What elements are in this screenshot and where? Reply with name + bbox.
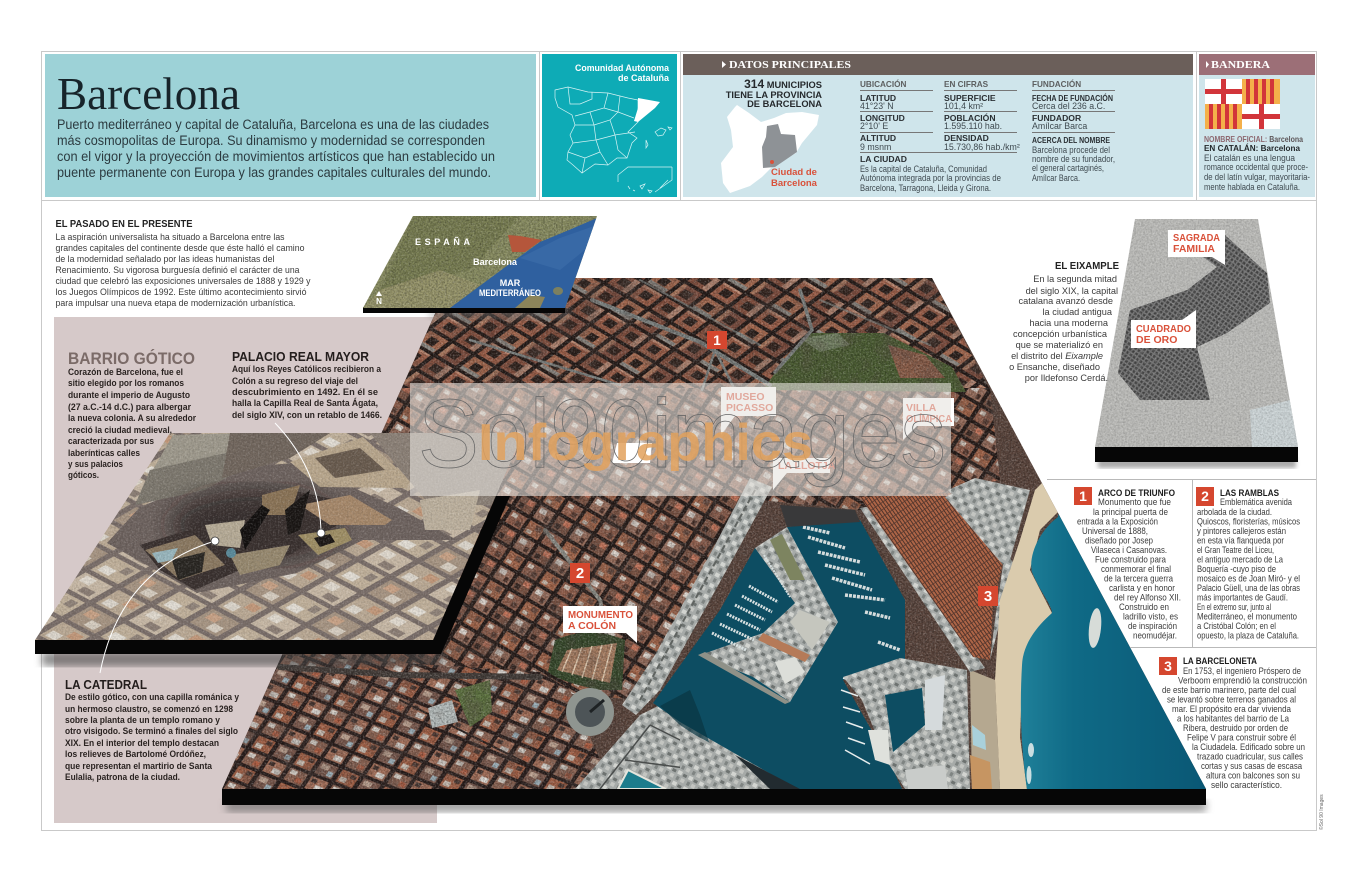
column: ubicación [860, 78, 933, 152]
note 3: La Barceloneta: Felipe V para construir sobre él [1187, 732, 1296, 742]
label: Museo Picasso [721, 387, 776, 435]
text block: La Catedral: De estilo gótico, con una capilla románica y [65, 692, 240, 702]
flag text [1204, 135, 1310, 192]
column: ubicación: UBICACIÓN [860, 78, 906, 89]
label: La Llotja [773, 458, 836, 490]
note 2: Las Ramblas: Quioscos, floristerías, músicos [1197, 516, 1300, 526]
label: Monumento a Colón: A COLÓN [568, 619, 616, 632]
text block: Barrio Gótico: sitio elegido por los romanos [68, 378, 184, 388]
port water [653, 520, 905, 789]
note 1: Arco de Triunfo [1074, 487, 1181, 640]
column: ubicación: 9 msnm [860, 142, 891, 152]
column: ubicación: LATITUD [860, 93, 896, 103]
text block: Palacio Real Mayor: Colón a su regreso del viaje del [232, 376, 358, 386]
marker 2 [570, 563, 590, 583]
locator heading: Comunidad Autónoma [575, 63, 670, 73]
text block: El Eixample: EL EIXAMPLE [1055, 260, 1119, 272]
note 2: Las Ramblas: a Cristóbal Colón; en el [1197, 621, 1276, 631]
label: La Llotja: LA LLOTJA [778, 460, 836, 472]
text block: El Eixample: concepción urbanística [1013, 329, 1108, 339]
label: Villa Olímpica: VILLA [906, 402, 937, 414]
note 2: Las Ramblas: 2 [1201, 488, 1209, 504]
city label: Barcelona [771, 178, 818, 189]
text block: Barrio Gótico: Corazón de Barcelona, fue el [68, 367, 183, 377]
note 1: Arco de Triunfo: 1 [1079, 488, 1087, 504]
lower left shadow and quay [680, 734, 740, 771]
label: Cuadrado de Oro: DE ORO [1136, 334, 1177, 346]
note 1: Arco de Triunfo: de la tercera guerra [1104, 574, 1174, 584]
text block: el pasado en el presente: EL PASADO EN EL PRESENTE [56, 218, 192, 230]
pier finger lines [841, 678, 870, 764]
column: fundación: nombre de su fundador, [1032, 154, 1115, 164]
text block: La Catedral: LA CATEDRAL [65, 678, 147, 692]
mottling [36, 433, 495, 640]
location satellite map: MEDITERRÁNEO [479, 288, 541, 298]
leader: Palacio Real Mayor [275, 423, 325, 537]
flag text: romance occidental que proce- [1204, 162, 1308, 172]
wharf wedge [755, 527, 838, 632]
watermark orange text: Infographics [478, 414, 813, 472]
la ciudad text: Barcelona, Tarragona, Lleida y Girona. [860, 183, 991, 193]
mottling over built land [236, 278, 1130, 789]
text block: El Eixample: que se materializó en [1016, 340, 1103, 350]
bandera header [1199, 54, 1315, 75]
intro text: puente permanente con Europa y las grandes capitales culturales del mundo. [57, 165, 491, 180]
column: ubicación: LONGITUD [860, 113, 905, 123]
note 2: Las Ramblas: el antiguo mercado de La [1197, 554, 1284, 564]
intro text [57, 117, 495, 180]
text block: El Eixample: la ciudad antigua [1043, 307, 1113, 317]
note 2: Las Ramblas: y pintores callejeros están [1197, 526, 1286, 536]
text block: Barrio Gótico: laberínticas calles [68, 448, 140, 458]
text block: Palacio Real Mayor: descubrimiento en 1492. En él se [232, 387, 378, 397]
flag text: mente hablada en Cataluña. [1204, 182, 1300, 192]
note 1: Arco de Triunfo: la principal puerta de [1093, 507, 1168, 517]
panel: pink background for Barrio Gótico [54, 317, 437, 823]
text block: Palacio Real Mayor: Aquí los Reyes Católicos recibieron a [232, 364, 382, 374]
column: fundación: FECHA DE FUNDACIÓN [1032, 92, 1113, 103]
note 3: La Barceloneta: Verboom emprendió la construcción [1178, 676, 1307, 686]
title: Barcelona [57, 69, 240, 119]
note 2: Las Ramblas: mosaico es de Joan Miró- y el [1197, 574, 1300, 584]
open sea [1021, 505, 1210, 790]
text block: Barrio Gótico: creció la ciudad medieval, [68, 425, 172, 435]
note 1: Arco de Triunfo: Vilaseca i Casanovas. [1091, 545, 1167, 555]
map of Spain [555, 87, 672, 193]
marker 1 [707, 331, 727, 349]
note 2: Las Ramblas: arbolada de la ciudad. [1197, 507, 1272, 517]
label: Villa Olímpica [903, 398, 954, 440]
text block: La Catedral: un hermoso claustro, se comenzó en 1298 [65, 704, 233, 714]
text block: La Catedral: otro visigodo. Se terminó a finales del siglo [65, 726, 238, 736]
location satellite map: N [376, 297, 382, 306]
credit: ©Sol 90 Images [1318, 794, 1325, 830]
note 1: Arco de Triunfo: entrada a la Exposición [1077, 516, 1158, 526]
text block: La Catedral: los relieves de Bartolomé Ordóñez, [65, 749, 206, 759]
note 1: Arco de Triunfo: del rey Alfonso XII. [1114, 592, 1181, 602]
label: Sagrada Familia [1168, 230, 1225, 265]
text block: Palacio Real Mayor: PALACIO REAL MAYOR [232, 349, 370, 364]
column: fundación: Cerca del 236 a.C. [1032, 101, 1105, 111]
text block: el pasado en el presente: grandes capitales del continente desde que éste halló el camino [56, 243, 304, 253]
location satellite map: MAR [500, 278, 521, 288]
column: fundación: ACERCA DEL NOMBRE [1032, 135, 1110, 145]
location satellite map [360, 214, 600, 313]
label: Museo Picasso: PICASSO [726, 402, 773, 414]
location satellite map: Barcelona [473, 257, 518, 267]
la ciudad text: LA CIUDAD [860, 154, 907, 164]
note 1: Arco de Triunfo: ladrillo visto, es [1123, 612, 1178, 622]
east pier [843, 658, 970, 789]
column: fundación: el general cartaginés, [1032, 163, 1104, 173]
note 2: Las Ramblas: el Gran Teatre del Liceu, [1197, 545, 1274, 555]
breakwater [1088, 608, 1102, 648]
Eixample shadow [1098, 458, 1296, 468]
locator heading: de Cataluña [618, 73, 670, 83]
note 2: Las Ramblas: Palacio Güell, una de las obras [1197, 583, 1300, 593]
text block: El Eixample: por Ildefonso Cerdá. [1025, 373, 1108, 383]
note 1: Arco de Triunfo: diseñado por Josep [1085, 536, 1153, 546]
note 1: Arco de Triunfo: carlista y en honor [1109, 583, 1175, 593]
note 1: Arco de Triunfo: Universal de 1888, [1082, 526, 1148, 536]
note 2: Las Ramblas: En el extremo sur, junto al [1197, 602, 1271, 612]
column: en cifras: SUPERFICIE [944, 93, 996, 103]
la ciudad text [860, 154, 1001, 193]
municipios callout: 314 MUNICIPIOS [744, 77, 822, 91]
label: Cuadrado de Oro: CUADRADO [1136, 323, 1191, 335]
harbour boats [803, 527, 900, 650]
column: en cifras: 101,4 km² [944, 101, 983, 111]
note 1: Arco de Triunfo: ARCO DE TRIUNFO [1098, 488, 1175, 499]
note 3: La Barceloneta: mar. El propósito era dar vivienda [1172, 704, 1292, 714]
Maremagnum pier [700, 603, 838, 702]
note 1: Arco de Triunfo: de inspiración [1128, 621, 1177, 631]
column: fundación: Barcelona procede del [1032, 145, 1110, 155]
mini map shadow [430, 305, 570, 319]
watermark band [410, 379, 951, 496]
old town mid [300, 388, 1000, 700]
header bar [683, 54, 1193, 75]
text block: La Catedral: XIX. En el interior del templo destacan [65, 738, 219, 748]
note 3: La Barceloneta [1159, 656, 1307, 790]
text block: El Eixample: o Ensanche, diseñado [1009, 362, 1100, 372]
text block: Barrio Gótico: la nueva colonia. A su alrededor [68, 413, 196, 423]
note 3: La Barceloneta: a los habitantes del barrio de La [1177, 714, 1290, 724]
text block: el pasado en el presente [56, 218, 311, 308]
leader: La Catedral [100, 537, 219, 673]
note 2: Las Ramblas: opuesto, la plaza de Cataluña. [1197, 630, 1299, 640]
Eixample map [1090, 216, 1300, 462]
municipios callout [726, 77, 822, 109]
text block: El Eixample: catalana avanzó desde [1018, 296, 1113, 306]
column: fundación: Amílcar Barca [1032, 121, 1087, 131]
road to Barceloneta [860, 506, 985, 672]
note 2: Las Ramblas: Mediterráneo, el monumento [1197, 612, 1297, 622]
marina basin boats [712, 555, 790, 650]
panel: datos principales [683, 54, 1193, 197]
Barrio Gótico aerial inset [30, 430, 530, 654]
note 2: Las Ramblas [1196, 487, 1300, 640]
port promenade [622, 478, 772, 715]
beach [995, 480, 1060, 789]
header bar: DATOS PRINCIPALES [729, 59, 851, 71]
column: fundación: Amílcar Barca. [1032, 173, 1080, 183]
note 3: La Barceloneta: En 1753, el ingeniero Próspero de [1183, 666, 1301, 676]
column: fundación [1032, 78, 1115, 183]
text block: El Eixample: del siglo XIX, la capital [1026, 286, 1118, 296]
intro text: con el vigor y la proyección de movimientos artísticos que han establecido un [57, 149, 495, 164]
text block: El Eixample: el distrito del Eixample [1011, 351, 1103, 361]
note 1: Arco de Triunfo: conmemorar el final [1101, 564, 1171, 574]
note 2: Las Ramblas: en esta vía flanqueda por [1197, 536, 1284, 546]
la ciudad text: Es la capital de Cataluña, Comunidad [860, 164, 987, 174]
note 3: La Barceloneta: la Ciudadela. Edificado sobre un [1192, 742, 1305, 752]
note 2: Las Ramblas: LAS RAMBLAS [1220, 488, 1279, 499]
panel: Comunidad Autónoma de Cataluña locator map [542, 54, 677, 197]
municipios callout: DE BARCELONA [747, 99, 822, 109]
text block: Palacio Real Mayor: del siglo XIV, con un retablo de 1466. [232, 410, 382, 420]
label: Sagrada Familia: FAMILIA [1173, 243, 1215, 255]
text block: el pasado en el presente: de la modernidad señalado por las ideas humanistas del [56, 254, 274, 264]
text block: El Eixample: hacia una moderna [1029, 318, 1109, 328]
label: Monumento a Colón [563, 606, 637, 643]
flag text: EN CATALÁN: Barcelona [1204, 143, 1300, 153]
marker 3 [978, 586, 998, 606]
text block: Palacio Real Mayor: halla la Capilla Real de Santa Ágata, [232, 398, 378, 408]
text block: El Eixample [1009, 260, 1119, 383]
marker 3: 3 [984, 588, 992, 605]
shadow under main map [226, 800, 1206, 812]
inset slab [35, 496, 510, 654]
Drassanes roof [548, 632, 625, 690]
note 1: Arco de Triunfo: neomudéjar. [1133, 630, 1177, 640]
label: Museo Picasso: MUSEO [726, 391, 765, 403]
note 1: Arco de Triunfo: Monumento que fue [1098, 497, 1171, 507]
text block: Barrio Gótico: (27 a.C.-14 d.C.) para albergar [68, 402, 191, 412]
column: en cifras: 1.595.110 hab. [944, 121, 1002, 131]
column: ubicación: ALTITUD [860, 133, 896, 143]
locator heading [575, 63, 670, 83]
note 3: La Barceloneta: trazado cuadricular, sus calles [1197, 752, 1303, 762]
text block: El Eixample: En la segunda mitad [1033, 274, 1117, 284]
intro text: más cosmopolitas de Europa. Su dinamismo y modernidad se corresponden [57, 133, 485, 148]
Barceloneta [860, 493, 1003, 660]
marker 2: 2 [576, 565, 584, 582]
lower grey quays [575, 706, 769, 789]
text block: Barrio Gótico: y sus palacios [68, 459, 123, 469]
cloister [172, 552, 205, 580]
text block: La Catedral [65, 678, 240, 782]
green square [455, 680, 492, 727]
Colón roundabout [566, 688, 614, 736]
column: ubicación: 2°10' E [860, 121, 888, 131]
upper blocks [153, 434, 230, 470]
text block: el pasado en el presente: los Juegos Olímpicos de 1992. Este último acontecimiento sirvió [56, 287, 306, 297]
text block: Barrio Gótico: caracterizada por sus [68, 436, 154, 446]
text block: Palacio Real Mayor [232, 349, 382, 420]
text block: el pasado en el presente: Renacimiento. Su vigorosa burguesía definió el carácter de una [56, 265, 300, 275]
note 3: La Barceloneta: Ribera, destruido por orden de [1183, 723, 1288, 733]
flag text: NOMBRE OFICIAL: Barcelona [1204, 135, 1303, 144]
location satellite map: ESPAÑA [415, 237, 470, 247]
cathedral complex [140, 492, 337, 590]
watermark outline text: Sol90images [418, 379, 946, 488]
main map base [222, 789, 1206, 805]
text block: Barrio Gótico: durante el imperio de Augusto [68, 390, 190, 400]
column: en cifras [944, 80, 1020, 152]
map of Catalonia [721, 105, 819, 193]
text block: La Catedral: que representan el martirio de Santa [65, 761, 213, 771]
text block: Barrio Gótico: BARRIO GÓTICO [68, 349, 195, 368]
column: ubicación: 41°23' N [860, 101, 894, 111]
column: fundación: FUNDACIÓN [1032, 78, 1081, 89]
panel: bandera [1199, 54, 1315, 197]
cathedral shadow [170, 489, 340, 561]
note 1: Arco de Triunfo: Fue construido para [1095, 554, 1167, 564]
note 3: La Barceloneta: de este barrio marinero, parte del cual [1162, 685, 1296, 695]
note 3: La Barceloneta: se levantó sobre terrenos ganados al [1167, 694, 1296, 704]
note 3: La Barceloneta: cortas y sus casas de escasa [1201, 761, 1303, 771]
note 2: Las Ramblas: Boquería -cuyo piso de [1197, 564, 1276, 574]
avenues [280, 280, 930, 780]
text block: Barrio Gótico: góticos. [68, 470, 99, 480]
eixample district [400, 278, 990, 392]
text block: el pasado en el presente: La aspiración universalista ha situado a Barcelona entre las [56, 232, 285, 242]
main aerial map of Barcelona [220, 278, 1220, 805]
note 2: Las Ramblas: Emblemática avenida [1220, 497, 1293, 507]
city label: Ciudad de [771, 167, 817, 178]
note 3: La Barceloneta: 3 [1164, 658, 1172, 674]
column: en cifras: POBLACIÓN [944, 112, 996, 123]
column: en cifras: 15.730,86 hab./km² [944, 142, 1020, 152]
plaza field around cathedral [107, 463, 457, 593]
text block: el pasado en el presente: ciudad que celebró las exposiciones universales de 1888 y 1929 y [56, 276, 311, 286]
label: Cuadrado de Oro [1131, 310, 1196, 348]
label: Monumento a Colón: MONUMENTO [568, 609, 633, 621]
column: fundación: FUNDADOR [1032, 113, 1082, 123]
text block: La Catedral: sobre la planta de un templo romano y [65, 715, 221, 725]
column: en cifras: DENSIDAD [944, 133, 989, 143]
park [763, 333, 966, 392]
flag text: de del latín vulgar, mayoritaria- [1204, 172, 1310, 182]
marker 1: 1 [713, 332, 721, 348]
lower left neighbourhood [222, 655, 600, 789]
text block: La Catedral: Eulalia, patrona de la ciudad. [65, 772, 180, 782]
panel: title and introduction [45, 54, 536, 197]
municipios callout: TIENE LA PROVINCIA [726, 90, 822, 100]
flag of Barcelona [1205, 79, 1280, 129]
la ciudad text: Autónoma integrada por la provincias de [860, 173, 1001, 183]
column: en cifras: EN CIFRAS [944, 80, 989, 89]
inset shadow [42, 652, 442, 666]
label: Villa Olímpica: OLÍMPICA [906, 412, 952, 425]
note 2: Las Ramblas: más importantes de Gaudí. [1197, 592, 1288, 602]
label: Sagrada Familia: SAGRADA [1173, 232, 1220, 244]
intro text: Puerto mediterráneo y capital de Cataluña, Barcelona es una de las ciudades [57, 117, 489, 132]
note 1: Arco de Triunfo: Construido en [1119, 602, 1169, 612]
note 3: La Barceloneta: altura con balcones son su [1206, 770, 1300, 780]
city label [771, 167, 818, 189]
note 3: La Barceloneta: sello característico. [1211, 780, 1282, 790]
dividers for the numbered notes [1047, 480, 1316, 648]
text block: Barrio Gótico [68, 349, 196, 480]
text block: el pasado en el presente: para impulsar una nueva etapa de modernización urbanística. [56, 298, 296, 308]
bandera header: BANDERA [1211, 59, 1270, 71]
flag text: El catalán es una lengua [1204, 153, 1295, 163]
note 3: La Barceloneta: LA BARCELONETA [1183, 656, 1257, 667]
